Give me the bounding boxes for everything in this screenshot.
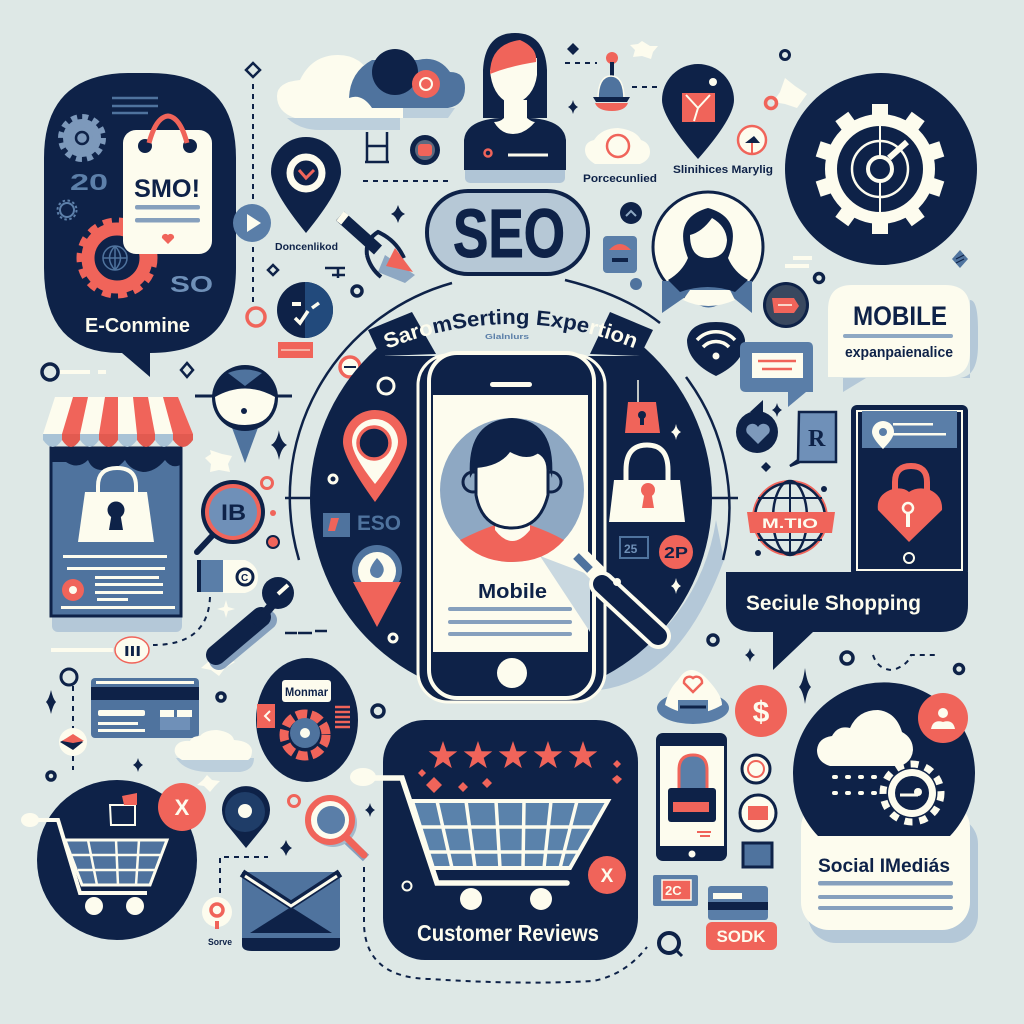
magnifier shadow (540, 556, 590, 632)
icon: small tiles: 2P (664, 545, 688, 562)
icon: letter R card: R (808, 426, 826, 452)
panel: gear circle (785, 73, 977, 265)
icon: globe badge: M.TIO (762, 515, 818, 531)
icon: phone small (656, 733, 727, 861)
icon: diamond top (246, 63, 260, 77)
icon: cloud with target (585, 128, 650, 164)
icon: envelope (242, 872, 340, 951)
icon: small tiles: 25 (624, 542, 638, 556)
text: customer reviews: Customer Reviews (417, 920, 599, 946)
text: SO: SO (170, 271, 213, 297)
icon: shopping tag: SMO! (134, 175, 200, 203)
icon: coral pin (343, 410, 407, 502)
panel: e-commerce bubble (44, 73, 236, 377)
icon: red padlock (625, 380, 660, 433)
icon: coral x: X (601, 866, 614, 887)
icon: coral x circle: X (175, 795, 190, 820)
panel: monmar gear: Monmar (285, 685, 328, 699)
icon: dollar coin: $ (753, 696, 770, 729)
icon: cloud (817, 710, 913, 793)
icon: shopping bag lock (609, 445, 685, 522)
panel: monmar gear (256, 658, 358, 782)
text: personalized: Porcecunlied (583, 173, 657, 185)
phone lock card (851, 405, 968, 577)
icon: play button (233, 204, 271, 242)
icon: magnifier left: IB (221, 500, 246, 525)
banner: headline arc: Glalnlurs (485, 332, 529, 341)
icon: person top (464, 33, 566, 183)
icon: sodk tag (706, 886, 777, 950)
icon: sparkles (46, 43, 811, 856)
icon: magnifier left (197, 478, 279, 552)
icon: small pin bottom (202, 897, 232, 948)
icon: dome beacon (593, 52, 630, 111)
icon: credit card (91, 678, 199, 738)
icon: letter R card (790, 412, 836, 466)
header lines (112, 98, 158, 113)
text: secure shopping: Seciule Shopping (746, 592, 921, 615)
text: social media: Social IMediás (818, 856, 950, 877)
icon: sodk tag: SODK (716, 927, 766, 946)
icon: location pin with tag (662, 64, 734, 159)
icon: coral x circle (158, 783, 206, 831)
icon: coin tile (197, 560, 258, 593)
panel: awning shop (43, 397, 193, 632)
icon: cloud left (175, 730, 254, 772)
icon: slate gear (61, 117, 103, 159)
icon: big cart (350, 768, 608, 910)
icon: ladder glyph (365, 132, 389, 162)
icon: coral x (588, 856, 626, 894)
icon: note badge (51, 637, 149, 663)
panel: mobile experience (828, 285, 978, 392)
panel: secure shopping (726, 405, 968, 670)
icon: magnifier handle (570, 546, 658, 636)
icon: small 2C tile (653, 875, 698, 906)
icon: coral seal (62, 579, 84, 601)
icon: shopping tag (123, 116, 212, 254)
icon: coral magnifier (288, 796, 366, 858)
icon: side gem (763, 282, 809, 328)
stars (418, 741, 622, 793)
panel: cart circle (21, 780, 206, 940)
text: 20: 20 (70, 169, 108, 195)
panel: social media (793, 682, 978, 943)
text: ESO tag (323, 512, 401, 537)
icon: user avatar in magnifier (440, 418, 584, 562)
text: ESO tag: ESO (357, 512, 401, 535)
text: smart marketing: Slinihices Marylig (673, 164, 773, 176)
icon: small 2C tile: 2C (665, 883, 682, 898)
icon: chat bubble (740, 342, 813, 407)
title: SEO badge: SEO (453, 195, 565, 272)
icon: diamond bullet (59, 669, 87, 756)
icon: wifi pin (687, 322, 745, 376)
icon: coin tile: C (241, 573, 248, 584)
text: downloaded: Doncenlikod (275, 241, 338, 253)
icon: small tiles by SEO (603, 202, 642, 290)
icon: dollar coin (735, 685, 787, 737)
icon: dark pin small (222, 786, 270, 848)
panel: central ring arcs (285, 280, 738, 560)
icon: phone (418, 353, 605, 702)
text: E-Commerce label: E-Conmine (85, 315, 190, 337)
icon: small tiles (620, 535, 693, 569)
text lines (61, 555, 175, 609)
icon: small gear (58, 200, 76, 220)
navy scallops (50, 448, 182, 472)
banner: headline arc: SaromSerting Expertion (384, 309, 636, 348)
small dark rings (329, 378, 397, 642)
connector lines (73, 63, 938, 983)
icon: heart dome badge (657, 670, 729, 724)
icon: dark heart (736, 400, 778, 453)
icon: coral person (918, 693, 968, 743)
icon: rocket tool (340, 216, 415, 283)
panel: customer reviews (350, 720, 638, 960)
icon: flag (110, 793, 137, 825)
icon: wrench (216, 577, 327, 660)
icon: small pin bottom: Sorve (208, 937, 232, 948)
panel: mobile experience: expanpaienalice (845, 344, 953, 361)
icon: coral gear with globe (80, 221, 154, 295)
panel: central circle (310, 309, 724, 704)
icon: padlock bag (78, 468, 154, 542)
icon: coral bar (278, 342, 313, 358)
icon: sparkles inside (671, 424, 681, 594)
icon: small coin stack (740, 755, 776, 867)
icon: blue diamond (952, 250, 968, 268)
icon: clouds top (277, 49, 465, 130)
icon: round arrow badge (277, 282, 333, 338)
icon: globe badge (747, 481, 835, 556)
icon: target pin (271, 137, 341, 233)
icon: coral ring badge (340, 357, 360, 377)
icon: search ring (659, 933, 682, 956)
icon: gear (883, 764, 941, 822)
icon: red badge (738, 50, 790, 154)
icon: dark badge (410, 135, 440, 165)
decorative pale sparkles (60, 41, 812, 792)
icon: small rings (42, 265, 964, 780)
icon: note badge: III (124, 643, 141, 660)
awning stripes (43, 397, 193, 447)
icon: lower pin (352, 545, 402, 627)
panel: mobile experience: MOBILE (853, 301, 947, 331)
icon: person circle (653, 192, 763, 313)
icon: head with pin (195, 365, 292, 463)
text: mobile label: Mobile (478, 581, 547, 603)
icon: cart (21, 813, 167, 915)
